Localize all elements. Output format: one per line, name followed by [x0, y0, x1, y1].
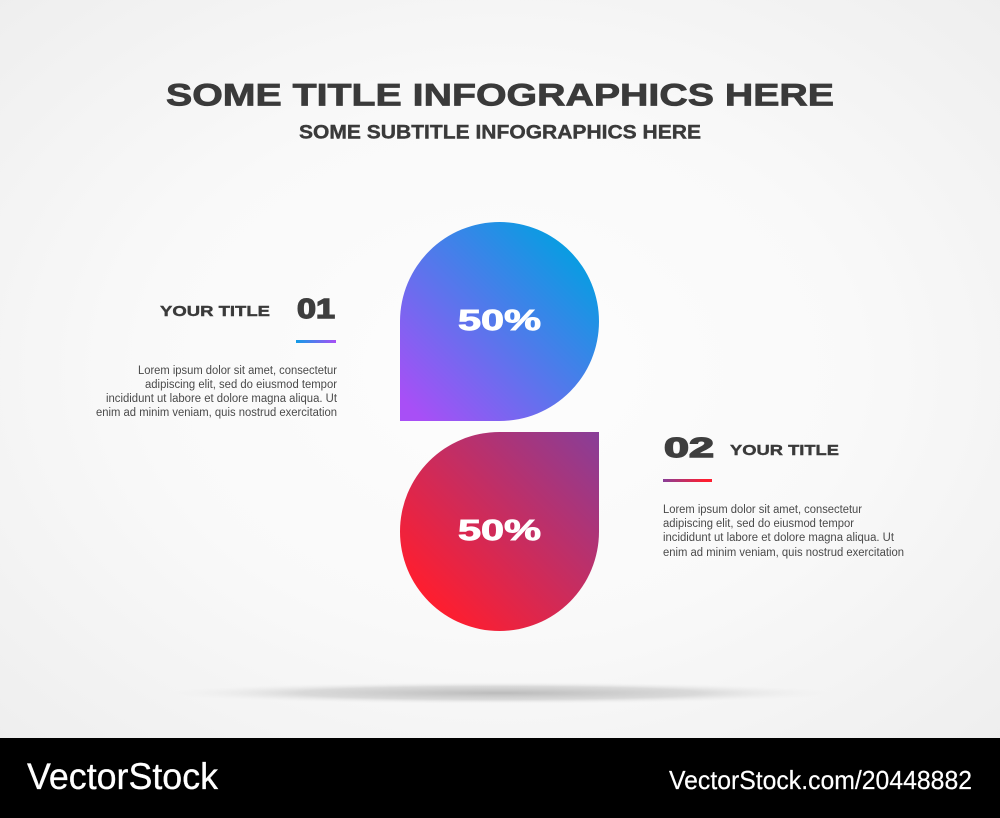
item 01 body text: enim ad minim veniam, quis nostrud exercitation: [96, 407, 337, 419]
item 02 body text: incididunt ut labore et dolore magna aliqua. Ut: [663, 532, 895, 544]
subtitle: SOME SUBTITLE INFOGRAPHICS HERE: [299, 122, 701, 144]
item 01 body text: incididunt ut labore et dolore magna aliqua. Ut: [106, 393, 338, 405]
top value: 50%: [458, 305, 541, 337]
top drop shape: [400, 222, 599, 421]
item 01 body text: [96, 365, 338, 419]
ground shadow: [165, 682, 835, 704]
item 01 body text: Lorem ipsum dolor sit amet, consectetur: [138, 365, 337, 377]
footer url: VectorStock.com/20448882: [669, 765, 972, 795]
chart: bottom drop 50%: [400, 432, 599, 631]
panel: item 01 text: [96, 293, 338, 419]
panel: item 02 text: [663, 432, 904, 559]
item 02 body text: enim ad minim veniam, quis nostrud exercitation: [663, 547, 904, 559]
item 01 number: 01: [297, 293, 335, 324]
footer logo: VectorStock: [27, 756, 218, 797]
bottom drop shape: [400, 432, 599, 631]
title: SOME TITLE INFOGRAPHICS HERE: [166, 76, 834, 112]
item 02 body text: adipiscing elit, sed do eiusmod tempor: [663, 518, 854, 530]
item 02 number: 02: [664, 432, 714, 463]
chart: top drop 50%: [400, 222, 599, 421]
item 02 accent line: [663, 479, 712, 482]
footer bar: [0, 738, 1000, 818]
item 01 body text: adipiscing elit, sed do eiusmod tempor: [145, 379, 337, 391]
item 02 body text: [663, 504, 904, 559]
item 02 body text: Lorem ipsum dolor sit amet, consectetur: [663, 504, 862, 516]
bottom value: 50%: [458, 515, 541, 547]
item 02 heading: YOUR TITLE: [730, 442, 839, 459]
item 01 accent line: [296, 340, 336, 343]
item 01 heading: YOUR TITLE: [160, 303, 270, 320]
